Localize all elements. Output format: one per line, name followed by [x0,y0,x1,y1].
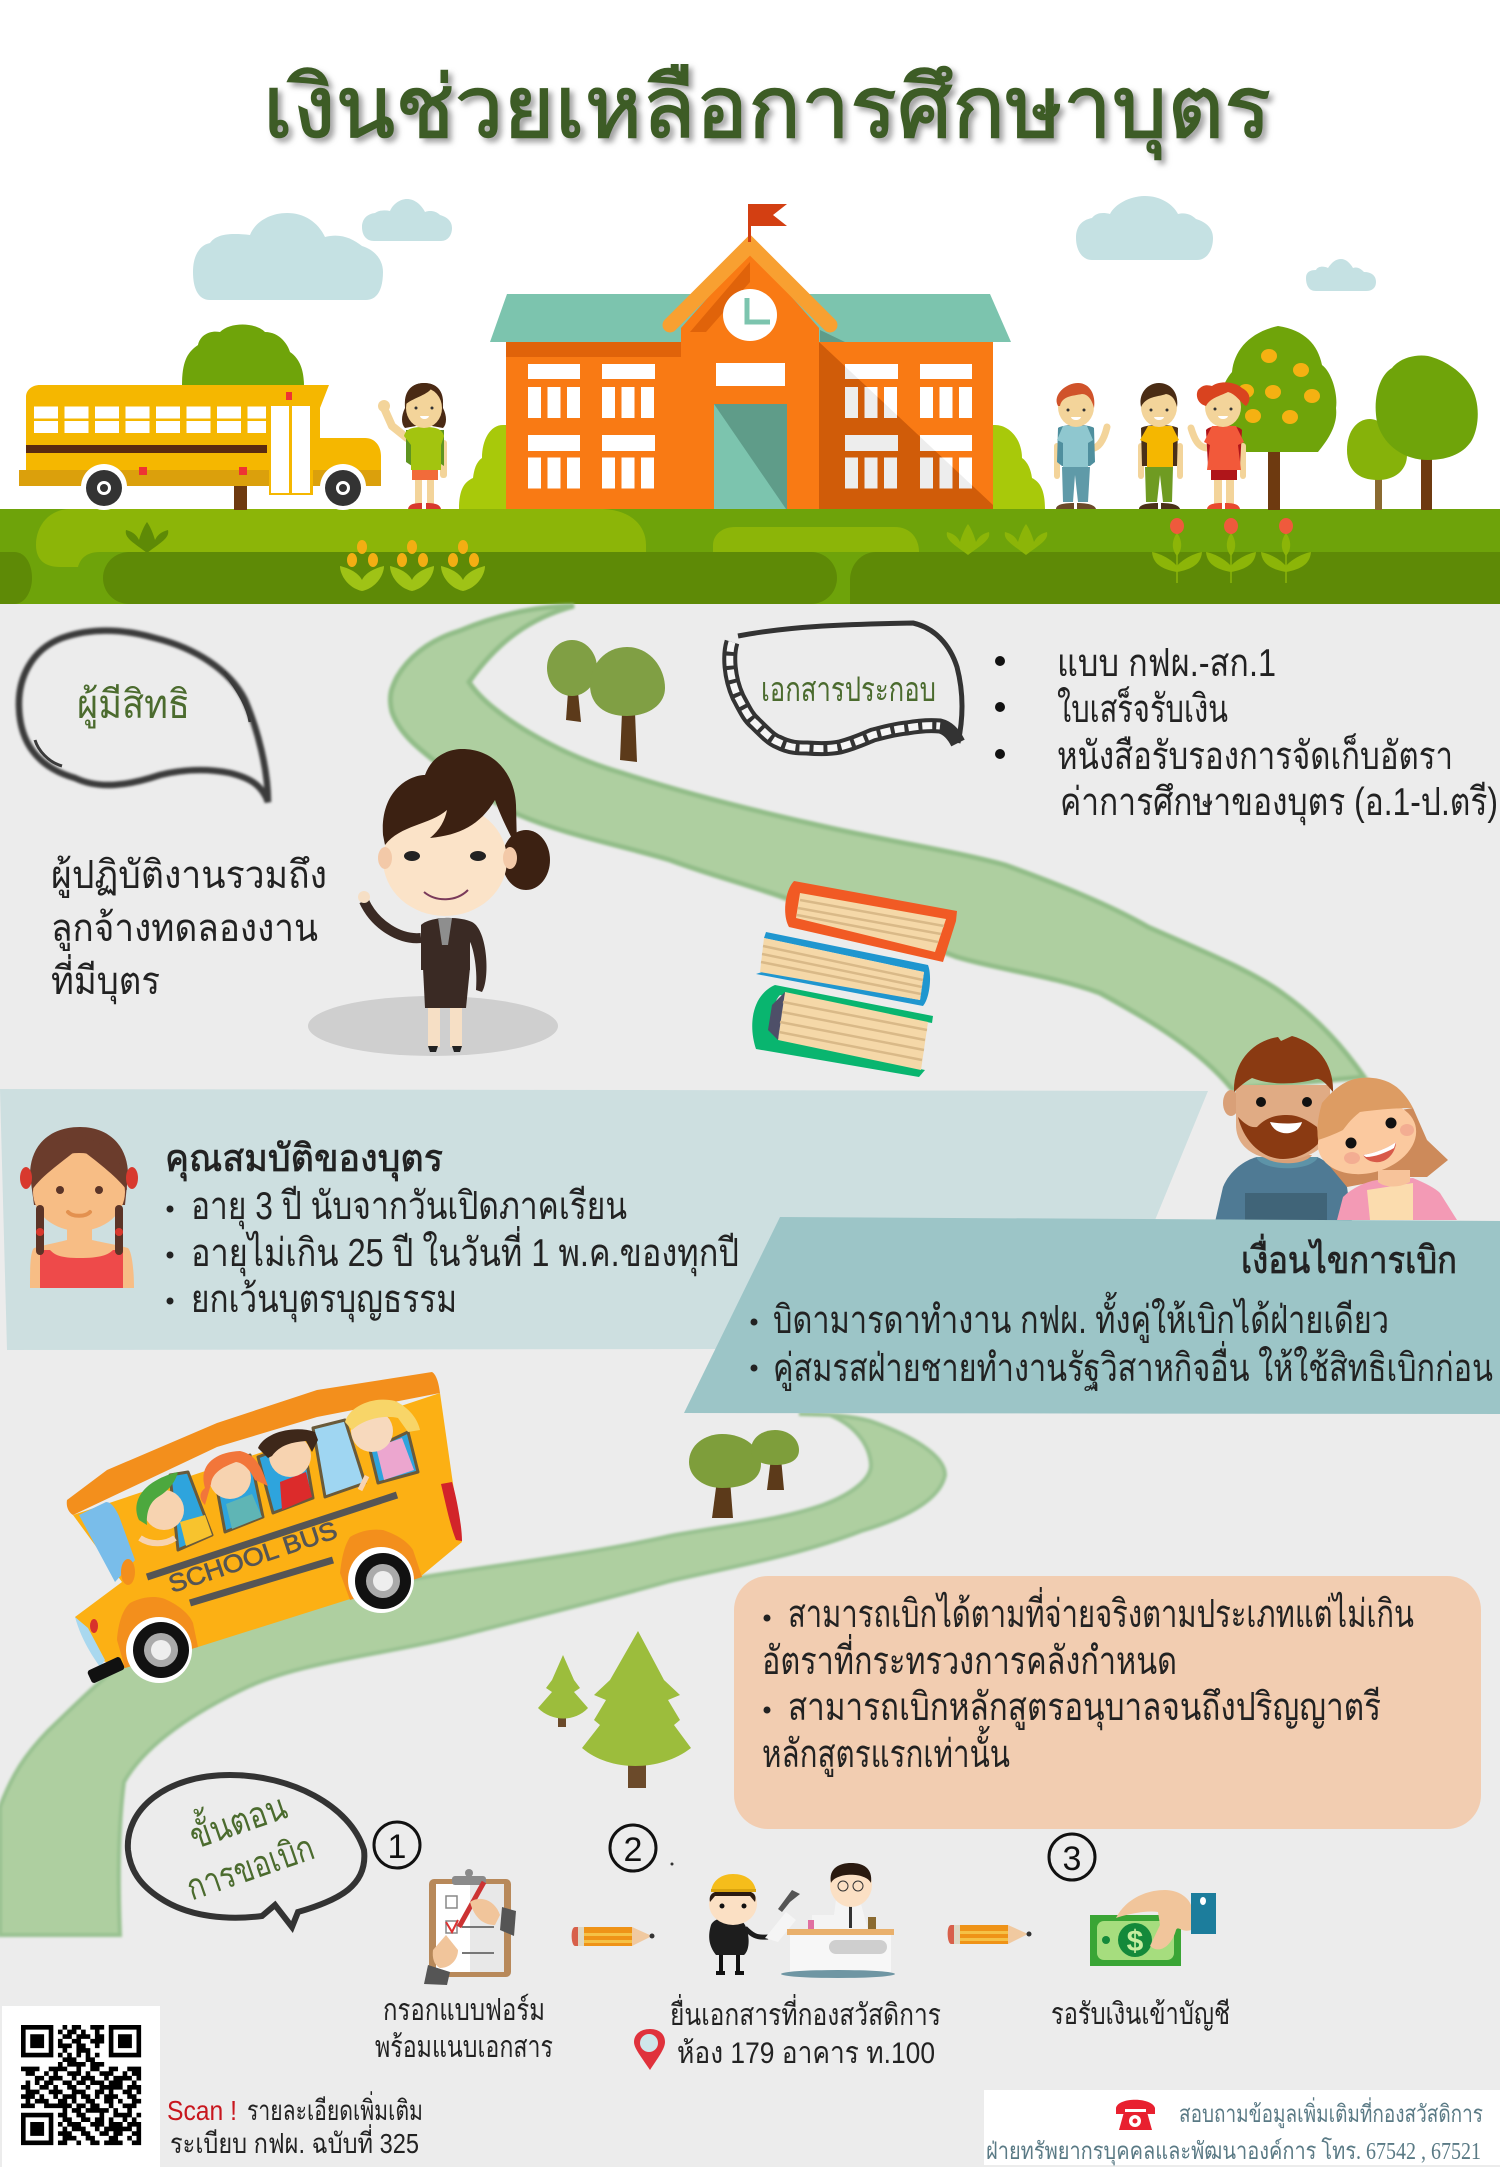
step number 1 [374,1822,420,1868]
walls [506,342,993,509]
roof [490,294,1011,342]
stripes [147,1495,397,1603]
road: lower [0,1414,945,1935]
qr code [2,2006,160,2167]
icon: round tree [1376,356,1478,510]
lettering: SCHOOL BUS [165,1516,341,1599]
heading: eligibility: ผู้มีสิทธิ [77,683,190,728]
door [714,404,787,509]
panel: claim rules [734,1576,1481,1829]
flag [748,206,751,242]
icon: pine trees [538,1631,691,1788]
panel: claim rules: หลักสูตรแรกเท่านั้น [762,1725,1010,1777]
step number 2 [610,1825,674,1871]
icon: girl with red shirt [1191,382,1249,509]
icon: boy with yellow shirt [1138,383,1183,509]
icon: woman employee [308,749,558,1056]
icon: tree behind bus [182,324,304,510]
icon: yellow bus [19,385,381,510]
icon: staff at service desk [709,1863,895,1978]
officer [832,1897,868,1930]
list: documents [995,642,1498,826]
step number 1: 1 [388,1828,406,1866]
tower [681,250,819,509]
desk [812,1915,836,1930]
list: child qualifications: ยกเว้นบุตรบุญธรรม [191,1278,457,1323]
wheels [117,1597,198,1668]
icon: school building [459,204,1045,509]
text: scan note: Scan ! [167,2095,237,2126]
text: step 1 caption: พร้อมแนบเอกสาร [375,2031,553,2064]
papers [765,1912,796,1942]
ground [0,509,1500,604]
windows [170,1420,418,1550]
visitor [709,1918,749,1955]
text: step 2 caption: ห้อง 179 อาคาร ท.100 [677,2037,935,2070]
speech bubble: procedure [128,1775,364,1927]
text: scan note: รายละเอียดเพิ่มเติม [247,2091,423,2126]
list: child qualifications [166,1185,739,1323]
icon: trees on upper road [547,640,665,762]
icon: money with hand [1090,1890,1216,1966]
icon: telephone [1116,2100,1155,2130]
text: eligibility details [51,854,327,1005]
speech bubble: procedure: การขอเบิก [181,1826,319,1908]
woman [1327,1108,1448,1187]
panel: child qualifications [0,1089,1208,1350]
text: scan note: ระเบียบ กฟผ. ฉบับที่ 325 [170,2124,419,2159]
icon: girl [20,1127,138,1288]
heading: claim conditions: เงื่อนไขการเบิก [1241,1234,1457,1282]
text: step 2 caption: ยื่นเอกสารที่กองสวัสดิการ [670,1994,941,2032]
list: claim conditions [750,1291,1493,1391]
text: step 1 caption: กรอกแบบฟอร์ม [383,1993,545,2027]
icon: orange tree [1220,326,1336,510]
tower roof [670,245,830,325]
speech bubble: documents [730,623,962,749]
list: child qualifications: อายุไม่เกิน 25 ปี ในวันที่ 1 พ.ค.ของทุกปี [191,1226,739,1277]
text: scan note [167,2091,423,2159]
panel: claim rules: อัตราที่กระทรวงการคลังกำหนด [762,1634,1177,1683]
step number 3: 3 [1063,1840,1081,1878]
icon: money with hand: $ [1127,1925,1144,1958]
icon: clouds [193,196,1376,300]
bushes [459,425,507,509]
icon: trees on lower road [689,1430,799,1518]
clock [723,289,777,341]
list: child qualifications: อายุ 3 ปี นับจากวันเปิดภาคเรียน [191,1185,627,1230]
icon: ground plants [126,518,1311,591]
text: eligibility details: ลูกจ้างทดลองงาน [51,907,318,951]
heading: documents: เอกสารประกอบ [761,671,936,709]
step number 3 [1049,1834,1095,1880]
panel: claim conditions [684,1217,1500,1414]
icon: location pin [634,2029,665,2070]
text: step 2 caption [670,1994,941,2070]
road: upper [390,606,1364,1089]
front window [79,1502,135,1582]
icon: couple [1215,1036,1457,1222]
icon: school bus with children [67,1372,462,1684]
list: documents: ใบเสร็จรับเงิน [1057,685,1228,731]
children [136,1400,420,1543]
icon: waving girl [378,383,447,509]
icon: boy with teal shirt [1054,383,1107,509]
title: เงินช่วยเหลือการศึกษาบุตร [263,60,1271,160]
heading: child qualifications: คุณสมบัติของบุตร [165,1138,443,1181]
windows [528,363,972,451]
text: step 3 caption: รอรับเงินเข้าบัญชี [1051,1998,1230,2031]
text: eligibility details: ผู้ปฏิบัติงานรวมถึง [51,854,327,898]
text: step 1 caption [375,1993,553,2064]
speech bubble: procedure: ขั้นตอน [182,1780,292,1857]
man [1215,1157,1352,1222]
speech bubble: eligibility [19,630,268,802]
icon: clipboard [424,1869,516,1985]
list: documents: แบบ กฟผ.-สก.1 [1057,642,1276,685]
icon: stacked books [752,881,957,1077]
body [73,1393,462,1668]
icon: small tree [1347,419,1407,510]
arrow: pencil 1 [572,1927,654,1946]
arrow: pencil 2 [948,1925,1032,1944]
step number 2: 2 [624,1831,642,1869]
panel: contact [984,2090,1500,2166]
text: eligibility details: ที่มีบุตร [51,954,160,1005]
rear light [441,1482,462,1541]
